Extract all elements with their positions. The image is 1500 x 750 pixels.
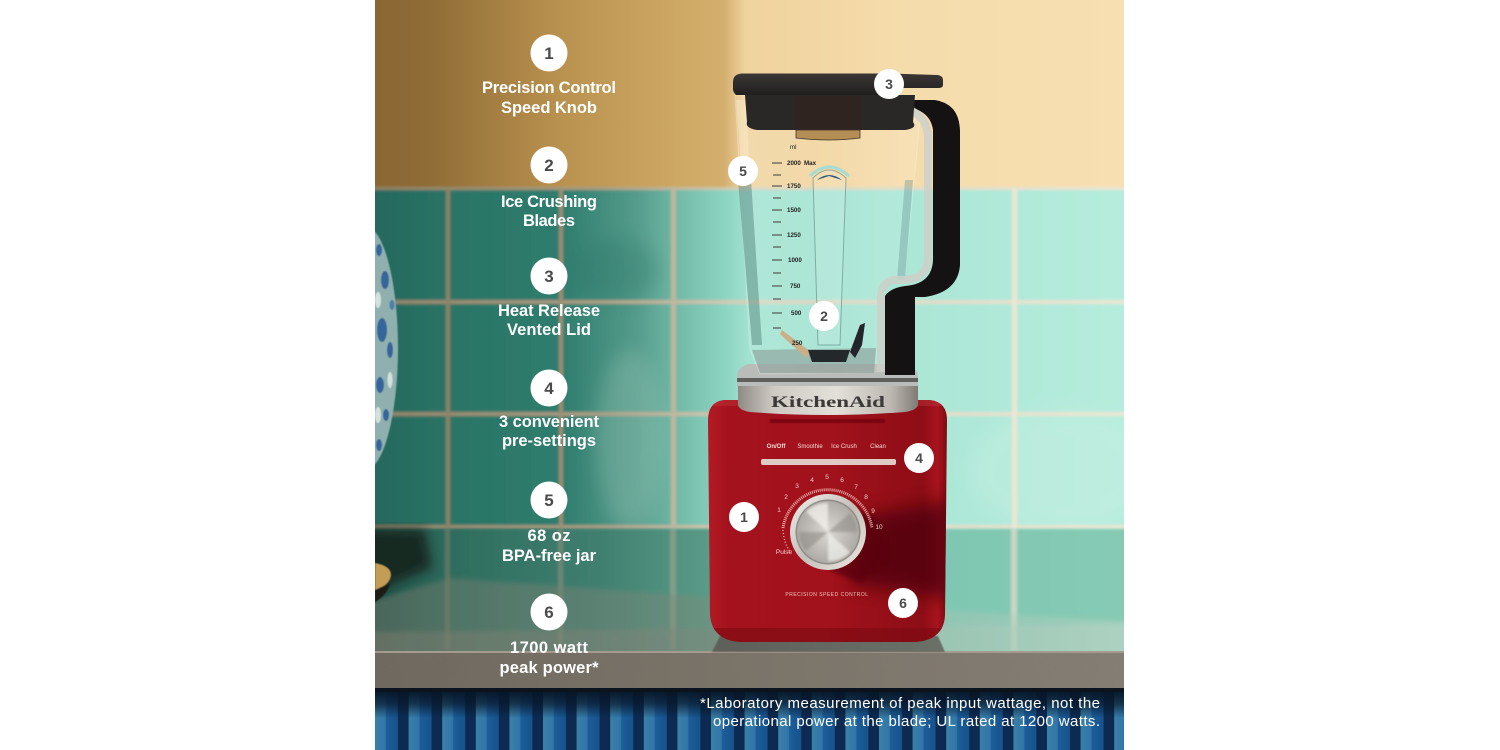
- glass jar: 1250: [787, 232, 801, 239]
- preset labels: On/Off: [767, 444, 786, 450]
- preset labels: Smoothie: [797, 444, 823, 450]
- feature 4: 4: [544, 379, 554, 398]
- measurement scale: [772, 163, 782, 328]
- badge 4 on presets: 4: [915, 450, 923, 466]
- feature 1: 1: [544, 44, 554, 63]
- wall: [360, 0, 1140, 190]
- red base: 4: [810, 477, 814, 484]
- preset labels: [767, 444, 886, 450]
- preset labels: Ice Crush: [831, 444, 857, 450]
- preset button strip: [761, 459, 896, 465]
- badge 1 on knob: [729, 502, 759, 532]
- glass jar: Max: [804, 160, 817, 167]
- feature 3: Vented Lid: [507, 321, 591, 339]
- feature 3: Heat Release: [498, 302, 600, 320]
- speed dial scale: [783, 490, 872, 552]
- red base: 8: [864, 494, 868, 501]
- center column: [813, 170, 846, 345]
- footnote: *Laboratory measurement of peak input wattage, not the: [700, 695, 1100, 712]
- badge 1 on knob: 1: [740, 509, 748, 525]
- feature 6: [500, 594, 599, 677]
- red base: 5: [825, 474, 829, 481]
- badge 3 on lid: [874, 69, 904, 99]
- counter top with tile reflection: [360, 529, 1140, 660]
- tiled backsplash: [360, 187, 1150, 532]
- badges on blender: [728, 69, 934, 618]
- infographic: blender features: [375, 0, 1124, 750]
- gold bowl at left: [375, 563, 391, 602]
- red base: Pulse: [776, 549, 793, 556]
- black handle: [881, 100, 960, 375]
- feature 4: pre-settings: [502, 432, 596, 450]
- glass jar: ml: [790, 144, 797, 151]
- red base: 3: [795, 483, 799, 490]
- precision speed control label: PRECISION SPEED CONTROL: [785, 592, 869, 598]
- glass jar: 500: [791, 310, 802, 317]
- badge 5 on jar: 5: [739, 163, 747, 179]
- feature 5: BPA-free jar: [502, 547, 597, 565]
- feature 2: [501, 146, 597, 230]
- red base: 2: [784, 494, 788, 501]
- glass jar: 1000: [788, 257, 802, 264]
- glass jar: 750: [790, 283, 801, 290]
- badge 5 on jar: [728, 156, 758, 186]
- badge 6 on motor: [888, 588, 918, 618]
- feature 1: Precision Control: [482, 79, 616, 97]
- red base: [708, 400, 950, 642]
- preset labels: Clean: [870, 444, 886, 450]
- badge 4 on presets: [904, 443, 934, 473]
- counter edge: [375, 652, 1124, 690]
- red base: 6: [840, 477, 844, 484]
- feature 6: peak power*: [500, 659, 599, 677]
- feature 3: 3: [544, 267, 554, 286]
- footnote: [700, 695, 1100, 730]
- red base: 1: [777, 507, 781, 514]
- badge 2 on blades: [809, 301, 839, 331]
- feature 4: [499, 370, 600, 450]
- glass jar: 2000: [787, 160, 801, 167]
- badge 2 on blades: 2: [820, 308, 828, 324]
- feature 2: Blades: [523, 212, 575, 230]
- feature 5: 68 oz: [528, 527, 570, 545]
- glass jar: [735, 95, 920, 374]
- feature list: [482, 34, 616, 677]
- footnote: operational power at the blade; UL rated at 1200 watts.: [713, 713, 1100, 730]
- silver collar with brand: [737, 364, 918, 415]
- feature 4: 3 convenient: [499, 413, 600, 431]
- feature 2: 2: [544, 156, 554, 175]
- foot shadow: [712, 636, 945, 652]
- speed knob: [790, 494, 866, 570]
- blender: [708, 74, 960, 652]
- feature 6: 1700 watt: [510, 639, 588, 657]
- feature 5: 5: [544, 491, 554, 510]
- glass jar: 1500: [787, 207, 801, 214]
- badge 3 on lid: 3: [885, 76, 893, 92]
- glass jar: 250: [792, 340, 803, 347]
- blue slatted cabinet: [375, 688, 1124, 750]
- feature 3: [498, 258, 600, 339]
- red base: 7: [854, 484, 858, 491]
- feature 1: Speed Knob: [501, 99, 597, 117]
- badge 6 on motor: 6: [899, 595, 907, 611]
- feature 2: Ice Crushing: [501, 193, 597, 211]
- red base: 9: [871, 508, 875, 515]
- silver collar with brand: KitchenAid: [771, 394, 886, 411]
- vase at left: [375, 231, 399, 465]
- red base: 10: [875, 524, 883, 531]
- glass jar: 1750: [787, 183, 801, 190]
- background: kitchen scene: [332, 0, 1150, 750]
- jar floor and blades: [752, 348, 876, 373]
- feature 6: 6: [544, 603, 554, 622]
- feature 1: [482, 34, 616, 117]
- feature 5: [502, 482, 597, 565]
- lid: [733, 74, 943, 140]
